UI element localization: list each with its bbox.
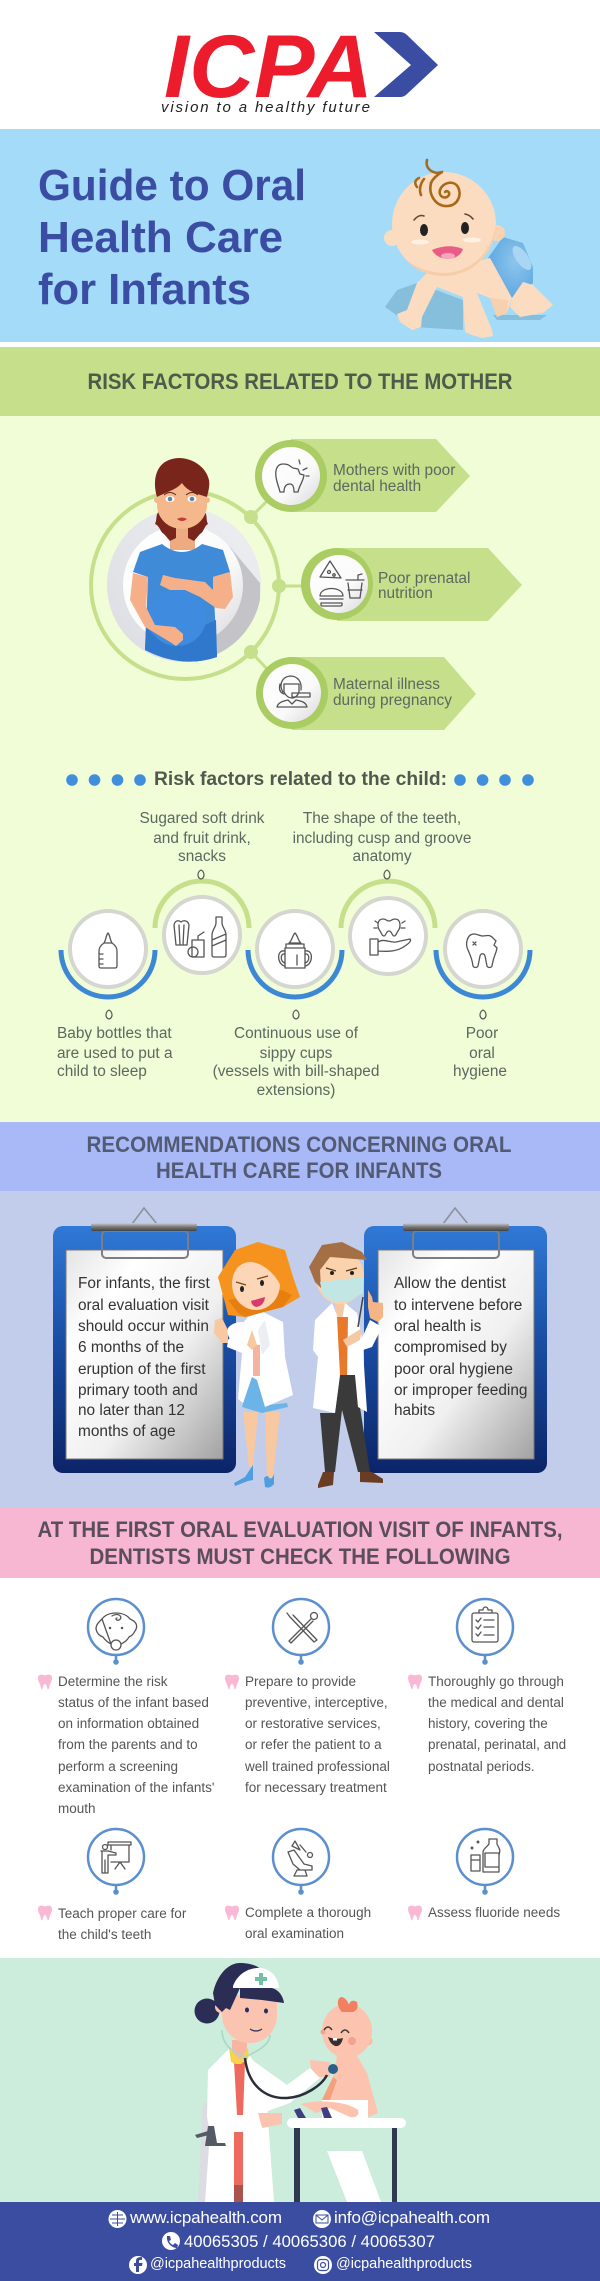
icon: facebook: [129, 2256, 147, 2274]
icon: patient with thermometer: [277, 676, 310, 707]
check item: risk status: from the parents and to: [58, 1737, 198, 1752]
icon: phone: [162, 2232, 180, 2250]
check item: preventive services: preventive, interceptive,: [245, 1695, 388, 1710]
check item: fluoride: Assess fluoride needs: [428, 1905, 560, 1920]
footer contact bar: @icpahealthproducts: [150, 2256, 286, 2272]
child risk item: poor oral hygiene: hygiene: [453, 1063, 507, 1080]
child risk item: poor oral hygiene: oral: [469, 1045, 495, 1062]
icon: damaged tooth: [276, 460, 309, 492]
icon: popcorn, juice and soda: [174, 917, 226, 957]
connectors: [244, 500, 305, 670]
child risk item: sugared drinks and snacks: [140, 810, 265, 973]
title text: [38, 161, 306, 314]
logo tagline: vision to a healthy future: [161, 99, 370, 116]
baby on table: [287, 1997, 406, 2202]
child risk item: sugared drinks and snacks: snacks: [178, 848, 226, 865]
callout: poor prenatal nutrition: [301, 548, 522, 621]
footer contact bar: @icpahealthproducts: [336, 2256, 472, 2272]
clipboard: first visit timing: For infants, the first: [78, 1275, 210, 1292]
callout: poor dental health: [255, 439, 470, 512]
subheading: child risk factors: [66, 768, 534, 790]
child risk item: sippy cups: (vessels with bill-shaped: [213, 1063, 379, 1080]
child risk item: baby bottles: [57, 911, 173, 1080]
clipboard: first visit timing: eruption of the first: [78, 1361, 206, 1378]
icon: teacher at board: [101, 1842, 131, 1873]
title banner: [0, 129, 600, 342]
icon: clipboard checklist: [472, 1607, 498, 1642]
clipboard: dentist intervention: Allow the dentist: [394, 1275, 507, 1292]
check item: preventive services: or restorative services,: [245, 1716, 381, 1731]
section heading: recommendations: [0, 1122, 600, 1191]
panel: checklist: [0, 1578, 600, 1958]
section heading: first oral evaluation: [0, 1508, 600, 1578]
icon: envelope: [313, 2210, 331, 2228]
title text: Health Care: [38, 213, 283, 262]
child risk item: poor oral hygiene: [436, 911, 530, 1080]
callout: poor prenatal nutrition: nutrition: [378, 585, 433, 602]
check item: oral examination: Complete a thorough: [245, 1905, 371, 1920]
check item: preventive services: Prepare to provide: [245, 1674, 356, 1689]
callout: maternal illness: [256, 657, 476, 730]
icon: dental chair: [288, 1841, 312, 1876]
check item: preventive services: for necessary treatment: [245, 1780, 387, 1795]
check item: risk status: [38, 1599, 214, 1816]
footer contact bar: info@icpahealth.com: [334, 2208, 490, 2227]
check item: medical history: [408, 1599, 566, 1774]
callout: poor prenatal nutrition: Poor prenatal: [378, 570, 470, 587]
child risk item: sippy cups: Continuous use of: [234, 1025, 359, 1042]
check item: risk status: examination of the infants': [58, 1780, 214, 1795]
mother illustration with ring: [91, 458, 279, 679]
check item: fluoride: [408, 1829, 560, 1920]
woman dentist illustration: [214, 1242, 300, 1488]
check item: preventive services: well trained professional: [244, 1759, 390, 1774]
clipboard: dentist intervention: habits: [394, 1402, 435, 1419]
logo chevron: [374, 32, 438, 97]
clipboard: first visit timing: 6 months of the: [78, 1339, 184, 1356]
child risk item: baby bottles: child to sleep: [57, 1063, 147, 1080]
section heading: first oral evaluation: DENTISTS MUST CHECK THE FOLLOWING: [90, 1544, 510, 1569]
child risk item: poor oral hygiene: Poor: [466, 1025, 498, 1042]
check item: oral examination: [225, 1829, 371, 1941]
child risk item: tooth shape: [293, 810, 471, 974]
child risk item: tooth shape: including cusp and groove: [293, 830, 471, 847]
panel: recommendations: [0, 1191, 600, 1508]
callout: poor dental health: dental health: [333, 478, 421, 495]
icon: sippy cup: [279, 933, 311, 968]
child risk item: sippy cups: [213, 911, 379, 1099]
stethoscope: [245, 2058, 338, 2098]
clipboard: dentist intervention: or improper feeding: [394, 1382, 527, 1399]
clipboard: dentist intervention: oral health is: [394, 1318, 482, 1335]
check item: medical history: Thoroughly go through: [428, 1674, 564, 1689]
section heading: mother risk factors: [0, 347, 600, 416]
footer contact bar: [0, 2202, 600, 2281]
logo header: [0, 0, 600, 129]
section heading: first oral evaluation: AT THE FIRST ORAL EVALUATION VISIT OF INFANTS,: [38, 1517, 562, 1542]
child risk item: baby bottles: are used to put a: [57, 1045, 173, 1062]
icon: instagram: [314, 2256, 332, 2274]
clipboard: first visit timing: no later than 12: [78, 1402, 185, 1419]
clipboard: first visit timing: months of age: [78, 1423, 176, 1440]
clipboard: dentist intervention: to intervene before: [394, 1297, 522, 1314]
title text: for Infants: [38, 265, 251, 314]
clipboard: first visit timing: [53, 1208, 236, 1473]
panel: nurse and baby illustration: [0, 1958, 600, 2202]
child risk item: sippy cups: extensions): [257, 1082, 335, 1099]
icon: globe: [108, 2210, 126, 2228]
logo wordmark: ICPA: [164, 16, 373, 116]
clipboard: dentist intervention: [364, 1208, 547, 1473]
child risk item: tooth shape: The shape of the teeth,: [303, 810, 461, 827]
footer contact bar: 40065305 / 40065306 / 40065307: [184, 2232, 435, 2251]
clipboard: dentist intervention: poor oral hygiene: [394, 1361, 513, 1378]
section heading: recommendations: RECOMMENDATIONS CONCERNING ORAL: [86, 1132, 512, 1157]
subheading: child risk factors: Risk factors related to the child:: [154, 768, 447, 790]
icon: crossed dental tools: [287, 1612, 318, 1643]
check item: risk status: status of the infant based: [58, 1695, 209, 1710]
callout: maternal illness: during pregnancy: [333, 692, 452, 709]
man dentist illustration: [309, 1242, 383, 1488]
check item: risk status: perform a screening: [58, 1759, 178, 1774]
child risk item: tooth shape: anatomy: [352, 848, 412, 865]
section heading: recommendations: HEALTH CARE FOR INFANTS: [156, 1158, 442, 1183]
clipboard: first visit timing: primary tooth and: [78, 1382, 198, 1399]
icon: pizza, burger and drink: [320, 561, 364, 606]
child risk item: baby bottles: Baby bottles that: [57, 1025, 172, 1042]
footer contact bar: www.icpahealth.com: [129, 2208, 282, 2227]
check item: teach care: the child's teeth: [58, 1927, 151, 1942]
icon: baby face: [96, 1613, 137, 1650]
check item: preventive services: [225, 1599, 390, 1795]
white gap: [0, 342, 600, 347]
check item: teach care: [38, 1829, 187, 1942]
clipboard: dentist intervention: compromised by: [394, 1339, 507, 1356]
child risk item: sippy cups: sippy cups: [260, 1045, 333, 1062]
callout: maternal illness: Maternal illness: [333, 676, 440, 693]
title text: Guide to Oral: [38, 161, 306, 210]
check item: medical history: postnatal periods.: [428, 1759, 535, 1774]
icon: baby bottle: [99, 933, 117, 968]
icon: tooth over hand: [370, 919, 411, 955]
check item: risk status: mouth: [58, 1801, 96, 1816]
check item: risk status: on information obtained: [58, 1716, 199, 1731]
section heading: mother risk factors: RISK FACTORS RELATED TO THE MOTHER: [88, 369, 513, 394]
crawling baby illustration: [384, 160, 553, 338]
callout: poor dental health: Mothers with poor: [333, 462, 455, 479]
clipboard: first visit timing: oral evaluation visit: [78, 1297, 210, 1314]
check item: risk status: Determine the risk: [58, 1674, 168, 1689]
check item: medical history: prenatal, perinatal, and: [428, 1737, 566, 1752]
check item: medical history: history, covering the: [428, 1716, 548, 1731]
child risk item: sugared drinks and snacks: and fruit drink,: [153, 830, 251, 847]
icon: mouthwash and tube: [471, 1839, 500, 1872]
panel: risk factors background and contents: [0, 416, 600, 1122]
icon: decayed tooth: [467, 934, 497, 968]
check item: preventive services: or refer the patient to a: [245, 1737, 382, 1752]
child risk item: sugared drinks and snacks: Sugared soft drink: [140, 810, 265, 827]
check item: medical history: the medical and dental: [428, 1695, 564, 1710]
clipboard: first visit timing: should occur within: [78, 1318, 209, 1335]
nurse: [194, 1963, 330, 2202]
check item: oral examination: oral examination: [245, 1926, 344, 1941]
check item: teach care: Teach proper care for: [58, 1906, 187, 1921]
